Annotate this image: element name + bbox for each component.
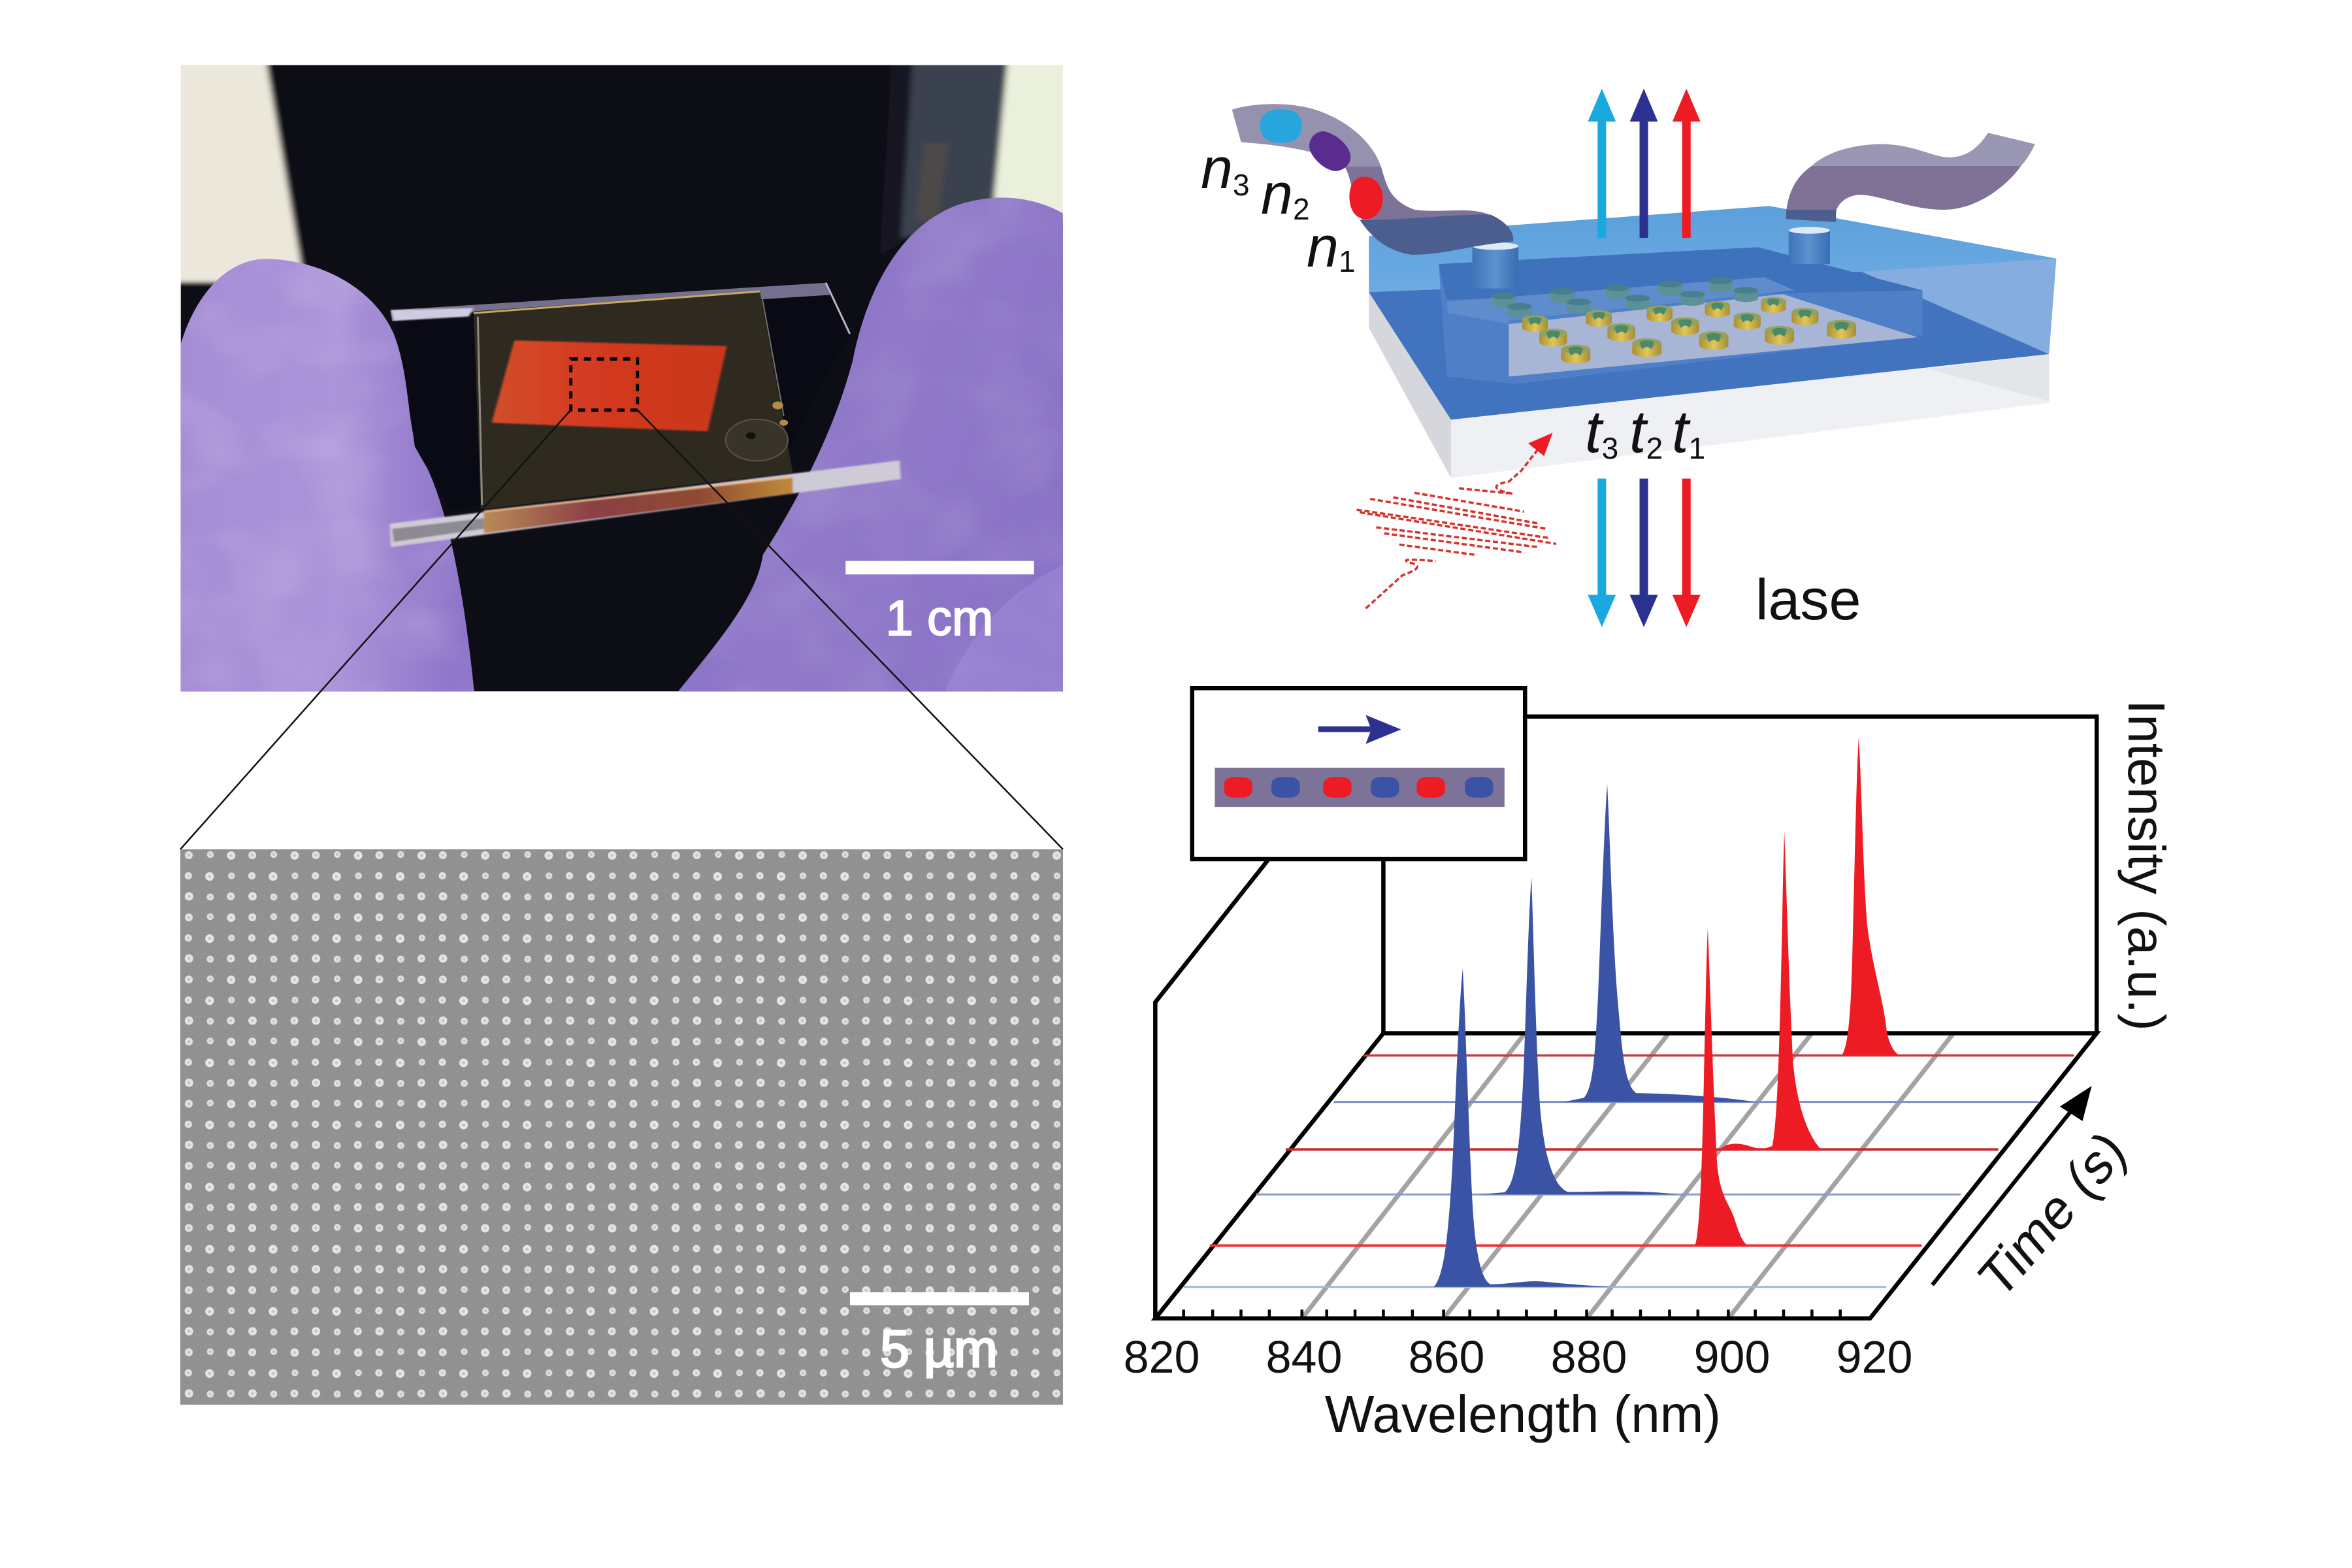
label: t2: t (1629, 399, 1646, 465)
x axis ticks (1184, 1310, 1840, 1318)
flow direction arrow (1318, 715, 1401, 744)
label: t2: 2 (1646, 431, 1663, 465)
tube strip (1215, 768, 1505, 807)
label: t3: t (1585, 399, 1602, 465)
scale label: 1 cm: 1 cm (886, 591, 993, 646)
spectrum peak: red, back (1842, 738, 1900, 1055)
refractive index droplets n3, n2, n1 (1260, 109, 1383, 219)
x axis tick labels: 900 (1694, 1331, 1770, 1382)
spectrum peak: blue, middle (1479, 877, 1677, 1194)
panel: SEM micrograph of nanoparticle lattice (180, 849, 1063, 1405)
x axis title: Wavelength (nm) (1325, 1385, 1721, 1443)
x axis tick labels: 820 (1124, 1331, 1200, 1382)
inlet and outlet posts (1472, 227, 1830, 289)
pump laser arrowhead (1528, 433, 1552, 456)
panel: 3D spectra chart (1124, 688, 2176, 1443)
label: t3: 3 (1602, 431, 1618, 465)
spectrum peak: red, front (1695, 928, 1748, 1245)
time axis title: Time (s) (1969, 1119, 2136, 1311)
scale label: 5 µm: 5 µm (880, 1320, 998, 1378)
spectrum peak: blue, back (1564, 784, 1756, 1102)
label: n1: n (1307, 214, 1339, 279)
label: n1: 1 (1339, 244, 1356, 278)
glass slide (406, 389, 429, 470)
x axis tick labels: 840 (1266, 1331, 1342, 1382)
downward emission arrows (1588, 479, 1701, 627)
left tubing (1232, 104, 1513, 255)
label: t1: 1 (1689, 431, 1705, 465)
panel: photograph of flexible sample held in gloved fingers (175, 61, 1069, 698)
upward emission arrows (1588, 89, 1701, 238)
pump laser pulse (1357, 448, 1556, 608)
label: n2: 2 (1293, 192, 1310, 226)
x axis tick labels (1124, 1331, 1912, 1382)
time axis arrow (1933, 1086, 2092, 1285)
label: n3: n (1201, 136, 1233, 201)
panel: microfluidic laser schematic (1201, 89, 2056, 632)
blue channel block (1369, 206, 2056, 419)
right glove finger (673, 198, 1069, 698)
left glove finger (175, 259, 475, 698)
spectrum peak: red, middle (1720, 832, 1821, 1149)
x axis tick labels: 920 (1837, 1331, 1912, 1382)
label: t1: t (1672, 399, 1689, 465)
dashed selection box (571, 359, 638, 410)
bottom edge of the slide (389, 308, 901, 547)
zoom guide lines from sample to micrograph (180, 410, 1063, 849)
substrate (1369, 292, 2049, 478)
y axis title: Intensity (a.u.) (2117, 700, 2176, 1031)
scale bar: 1 cm (845, 561, 1034, 574)
film on the glass (474, 291, 793, 510)
right tubing (1786, 133, 2035, 222)
inset: alternating droplet train (1192, 688, 1525, 859)
spectrum traces (1184, 1055, 2074, 1287)
scale bar: 5 micrometres (850, 1292, 1029, 1305)
label: n3: 3 (1233, 168, 1250, 202)
red perovskite film (491, 340, 727, 431)
label: lase: lase (1756, 567, 1861, 632)
axes box (1155, 717, 2097, 1318)
gold nanoparticle array (1492, 278, 1856, 363)
label: n2: n (1261, 161, 1293, 226)
grid lines on the floor (1302, 1033, 1953, 1318)
spectrum peak: blue, front (1433, 969, 1614, 1287)
droplets (1224, 777, 1493, 798)
x axis tick labels: 880 (1551, 1331, 1627, 1382)
x axis tick labels: 860 (1409, 1331, 1484, 1382)
